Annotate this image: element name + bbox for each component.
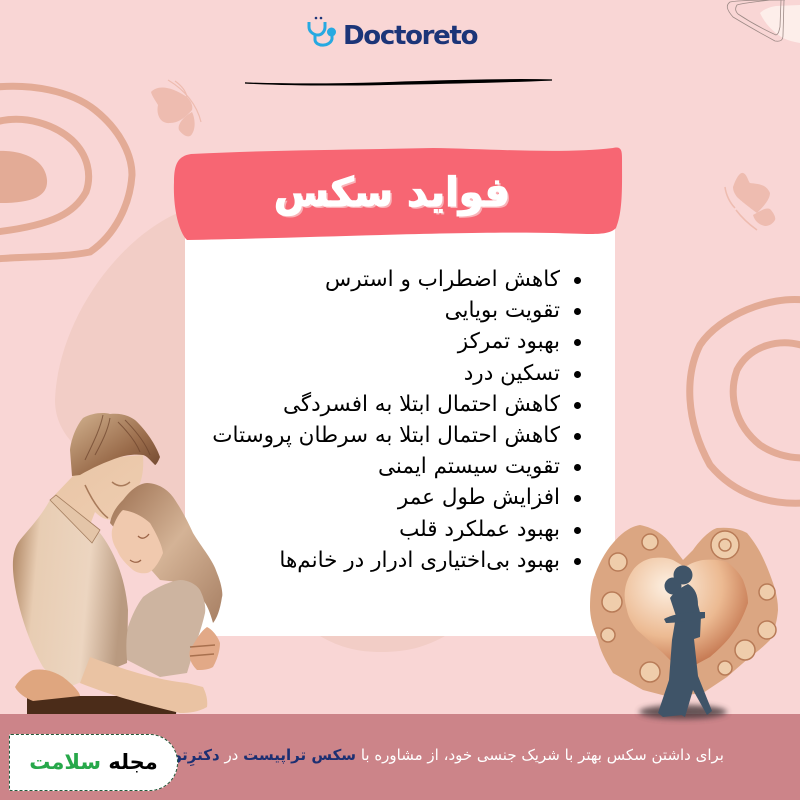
- footer band: [0, 714, 800, 800]
- benefits list: افزایش طول عمر: [398, 485, 560, 510]
- butterfly left: [151, 80, 201, 136]
- man body: [13, 500, 128, 690]
- butterfly right: [725, 173, 775, 230]
- woman hair: [110, 483, 222, 623]
- shadow: [639, 705, 727, 719]
- badge: health magazine: مجله سلامت: [29, 750, 158, 774]
- benefits list: [212, 267, 581, 573]
- logo: [308, 16, 478, 51]
- divider line: [245, 79, 552, 86]
- benefits list: بهبود تمرکز: [458, 329, 560, 354]
- icon: stethoscope: [308, 16, 336, 47]
- brand name: Doctoreto: [343, 21, 477, 51]
- benefits list: بهبود بی‌اختیاری ادرار در خانم‌ها: [279, 548, 560, 573]
- solid shape left: [0, 151, 47, 203]
- ornament ring: [590, 525, 778, 697]
- footer text: برای داشتن سکس بهتر با شریک جنسی خود، از مشاوره با سکس تراپیست در دکترِتو: [173, 746, 724, 764]
- title: فواید سکس: [274, 170, 510, 216]
- woman top: [126, 580, 205, 677]
- benefits list: کاهش احتمال ابتلا به افسردگی: [283, 392, 560, 417]
- benefits list: بهبود عملکرد قلب: [399, 516, 560, 542]
- man neck and face: [50, 455, 143, 525]
- benefits list: کاهش احتمال ابتلا به سرطان پروستات: [212, 423, 560, 448]
- man forearm and hand: [80, 657, 207, 713]
- woman face: [112, 510, 163, 573]
- benefits list: تسکین درد: [464, 361, 560, 386]
- heading banner: [174, 148, 622, 240]
- pale blob behind card: [55, 208, 600, 652]
- waist: [27, 696, 178, 714]
- man hair: [70, 413, 160, 476]
- benefits list: تقویت بویایی: [445, 298, 560, 323]
- man closed eye and beard shade: [85, 482, 130, 518]
- icon: embracing couple: [12, 413, 222, 714]
- panel: benefits card: [185, 228, 615, 636]
- shirt collar: [50, 495, 100, 543]
- woman closed eye and mouth: [130, 534, 149, 562]
- benefits list: کاهش اضطراب و استرس: [325, 267, 560, 292]
- ornament details: [601, 531, 776, 682]
- concentric rings left: [0, 86, 132, 259]
- badge: health magazine: [9, 734, 178, 791]
- hair strands: [85, 415, 150, 460]
- man back hand: [15, 669, 80, 701]
- fingers: [190, 645, 215, 656]
- heart: [625, 558, 748, 672]
- corner pale shape: [760, 5, 800, 43]
- icon: heart with figures: [590, 525, 778, 723]
- man front hand side: [189, 627, 220, 670]
- corner triangle outline: [727, 0, 785, 41]
- benefits list: تقویت سیستم ایمنی: [378, 454, 560, 479]
- concentric rings right: [690, 299, 800, 503]
- figures: [658, 566, 712, 717]
